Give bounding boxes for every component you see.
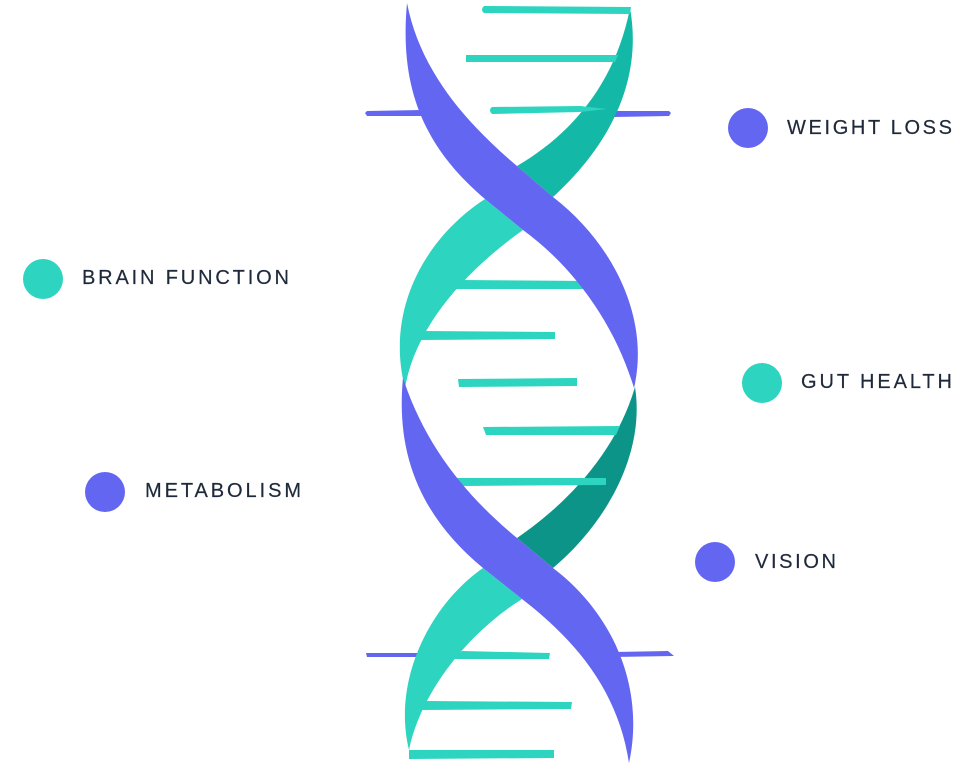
- upper light teal strand: [400, 199, 523, 388]
- upper purple strand: [406, 3, 638, 388]
- label: metabolism: METABOLISM: [145, 480, 301, 502]
- upper dark teal strand: [517, 8, 633, 197]
- lower dark teal strand: [517, 387, 637, 568]
- label: vision: VISION: [755, 551, 836, 573]
- label: brain function: [23, 259, 289, 299]
- label: metabolism: [85, 472, 301, 512]
- DNA helix: [365, 3, 674, 763]
- label: brain function: BRAIN FUNCTION: [82, 267, 289, 289]
- lower purple strand: [402, 378, 633, 763]
- label: weight loss: [728, 108, 952, 148]
- label: gut health: [742, 363, 952, 403]
- purple back rungs: [365, 110, 674, 657]
- lower light teal strand: [405, 568, 522, 750]
- label: vision: [695, 542, 836, 582]
- label: gut health: GUT HEALTH: [801, 371, 952, 393]
- label: weight loss: WEIGHT LOSS: [787, 117, 952, 139]
- teal rungs: [409, 6, 631, 759]
